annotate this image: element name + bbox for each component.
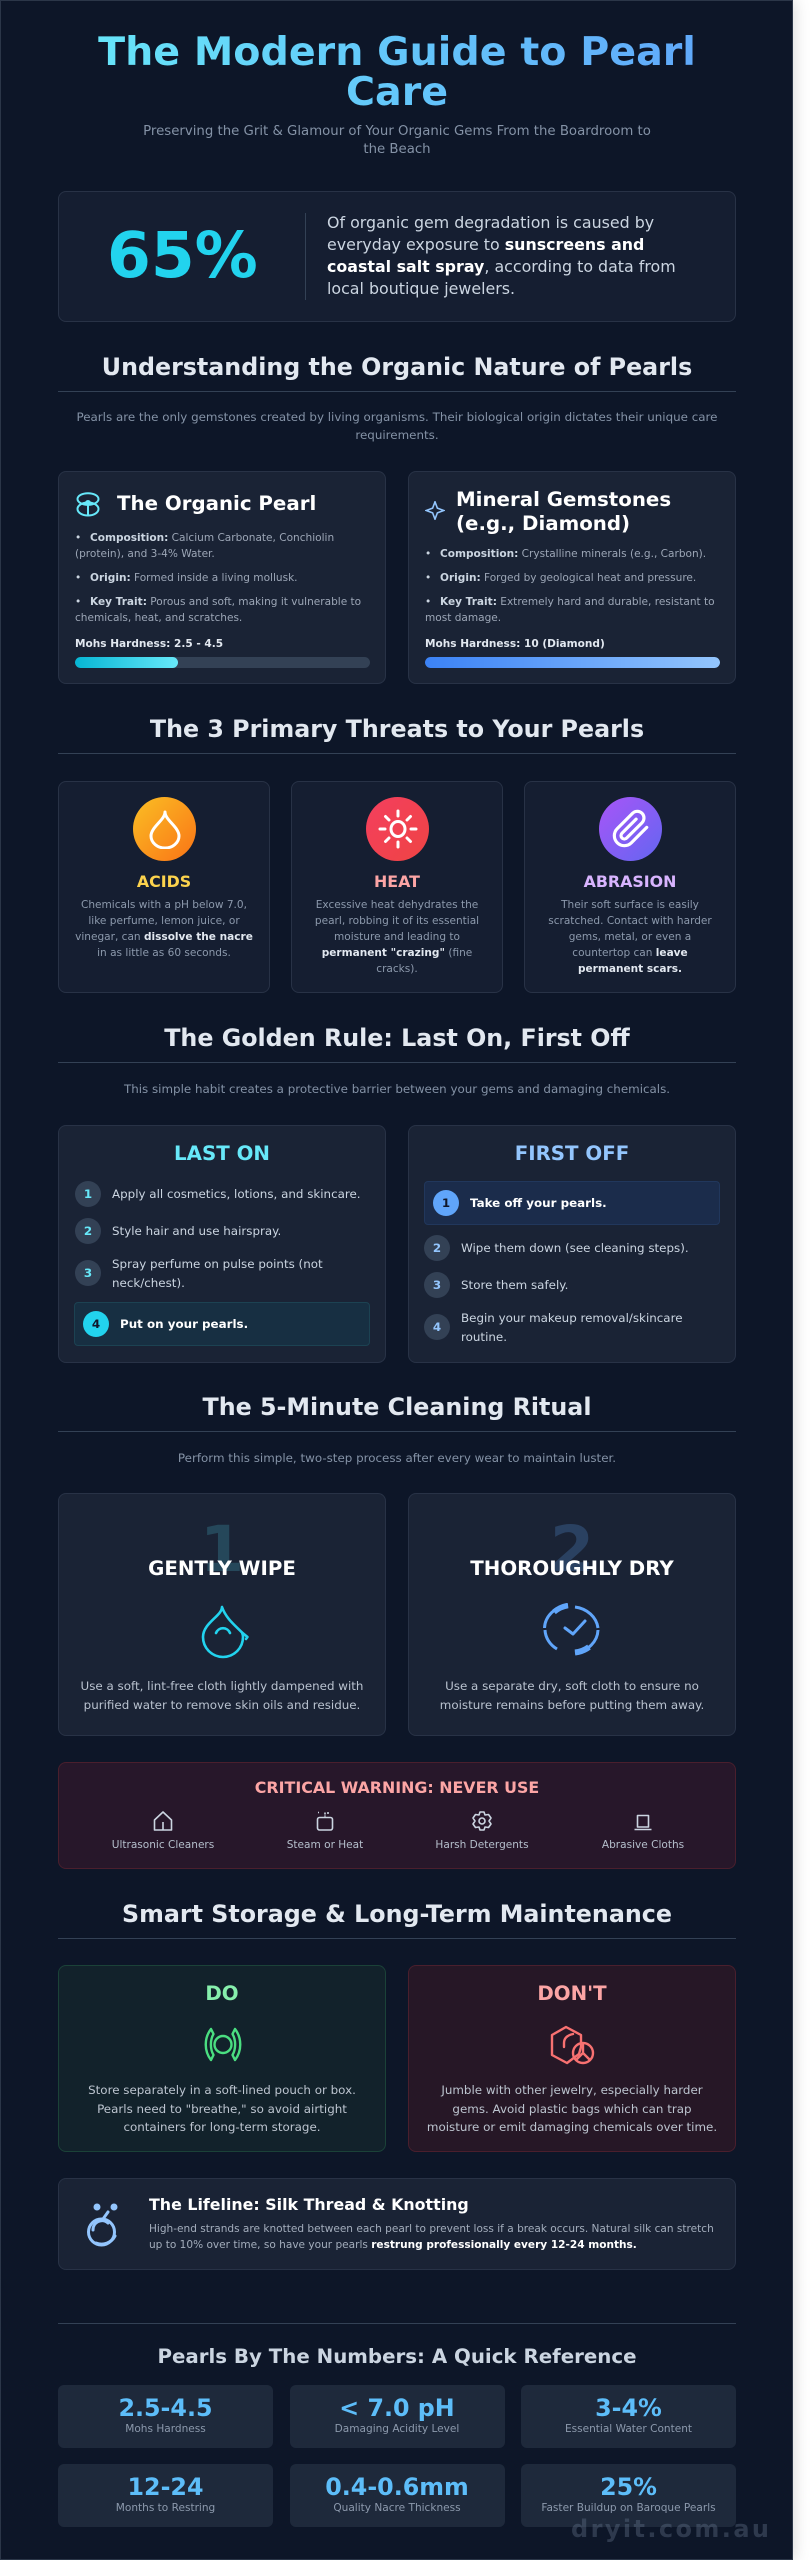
step 2 number: 2 <box>433 1241 441 1255</box>
subtitle: the Beach <box>363 142 431 157</box>
step 1 text: Take off your pearls. <box>470 1196 607 1210</box>
card heading: The Organic Pearl <box>117 492 316 515</box>
card text: Jumble with other jewelry, especially harder <box>441 2083 703 2097</box>
threat text: vinegar, can dissolve the nacre <box>75 931 253 943</box>
step 4 number <box>424 1314 450 1340</box>
stat: mohs hardness: 2.5-4.5 <box>118 2394 212 2422</box>
step 1 number <box>75 1181 101 1207</box>
stat text: Of organic gem degradation is caused by <box>327 213 654 232</box>
stat: nacre <box>290 2464 504 2527</box>
item: harsh detergents: Harsh Detergents <box>435 1839 529 1851</box>
step 2 number: 2 <box>84 1224 92 1238</box>
threat text: gems, metal, or even a <box>569 931 691 943</box>
intro text: golden rule: This simple habit creates a protective barrier between your gems and damaging chemicals. <box>124 1082 670 1096</box>
panel: critical warning <box>58 1762 736 1869</box>
panel: acids <box>58 781 270 993</box>
icon: pearl <box>76 492 100 516</box>
stat: water content <box>521 2385 736 2448</box>
intro text: cleaning ritual: Perform this simple, two-step process after every wear to maintain luster. <box>178 1451 616 1465</box>
panel: the organic pearl <box>58 471 386 684</box>
step 1 text: Apply all cosmetics, lotions, and skincare. <box>112 1187 361 1201</box>
panel: the lifeline <box>58 2178 736 2270</box>
stat: restring <box>58 2464 273 2527</box>
hardness bar <box>425 657 720 668</box>
card text: Store separately in a soft-lined pouch or box. <box>88 2083 356 2097</box>
stat text: coastal salt spray, according to data from <box>327 257 676 276</box>
item: steam or heat: Steam or Heat <box>287 1839 363 1851</box>
step 2 text: Wipe them down (see cleaning steps). <box>461 1241 689 1255</box>
card heading: DON'T <box>537 1982 607 2005</box>
card heading: DO <box>205 1982 239 2005</box>
panel: the organic pearl: Origin: Formed inside a living mollusk. <box>90 572 298 584</box>
panel: 65% stat callout <box>58 191 736 322</box>
item: steam or heat <box>287 1812 363 1851</box>
panel: first off <box>408 1125 736 1363</box>
item: abrasive cloths: Abrasive Cloths <box>602 1839 684 1851</box>
threat text <box>315 899 479 975</box>
card text: gems. Avoid plastic bags which can trap <box>452 2102 692 2116</box>
stat: water content: Essential Water Content <box>565 2423 692 2435</box>
threat text <box>548 899 712 975</box>
step 2 text: Style hair and use hairspray. <box>112 1224 281 1238</box>
intro text: organic nature: Pearls are the only gemstones created by living organisms. Their biological origin dictates their unique care <box>76 410 718 424</box>
title: Care <box>346 68 448 114</box>
stat: acidity <box>290 2385 504 2448</box>
step text: Use a separate dry, soft cloth to ensure no <box>445 1679 699 1693</box>
heading: by the numbers: Pearls By The Numbers: A Quick Reference <box>157 2345 637 2368</box>
panel: don't <box>408 1965 736 2152</box>
threat text: moisture and leading to <box>334 931 460 943</box>
intro text: organic nature <box>76 410 718 442</box>
stat: nacre: 0.4-0.6mm <box>325 2473 469 2501</box>
watermark: dryit.com.au <box>571 2515 771 2543</box>
stat: restring: 12-24 <box>128 2473 203 2501</box>
icon: sparkle gem <box>425 501 445 520</box>
icon: silk thread <box>87 2204 118 2246</box>
panel: mineral gemstones: • <box>425 572 431 584</box>
step 4 text: routine. <box>461 1330 507 1344</box>
stat divider <box>305 213 306 300</box>
threat text: in as little as 60 seconds. <box>97 947 231 959</box>
step 4 number: 4 <box>92 1317 100 1331</box>
step text: purified water to remove skin oils and residue. <box>84 1698 360 1712</box>
step 3 number: 3 <box>84 1266 92 1280</box>
panel: last on <box>58 1125 386 1363</box>
panel: mineral gemstones: • <box>425 596 431 608</box>
title <box>58 33 736 112</box>
item: ultrasonic cleaners: Ultrasonic Cleaners <box>112 1839 214 1851</box>
stat text: local boutique jewelers. <box>327 279 515 298</box>
step 3 text <box>112 1257 323 1290</box>
item: abrasive cloths <box>602 1814 684 1851</box>
step 2 number <box>75 1218 101 1244</box>
panel: mineral gemstones <box>408 471 736 684</box>
lifeline text: High-end strands are knotted between each pearl to prevent loss if a break occurs. Natural silk can stretch <box>149 2223 714 2235</box>
lifeline text: up to 10% over time, so have your pearls restrung professionally every 12-24 months. <box>149 2239 637 2251</box>
step 3 number <box>75 1260 101 1286</box>
panel: the organic pearl: chemicals, heat, and scratches. <box>75 612 242 624</box>
bullet list: (protein), and 3-4% Water. <box>75 548 215 560</box>
subtitle: Preserving the Grit & Glamour of Your Organic Gems From the Boardroom to <box>143 124 651 139</box>
icon: sun <box>366 797 429 861</box>
stat: water content: 3-4% <box>595 2394 662 2422</box>
item: ultrasonic cleaners <box>112 1811 214 1851</box>
step 2 number <box>424 1235 450 1261</box>
threat text: Chemicals with a pH below 7.0, <box>81 899 247 911</box>
stat: buildup: 25% <box>600 2473 657 2501</box>
step 3 number <box>424 1272 450 1298</box>
threat text: cracks). <box>376 963 418 975</box>
panel: the organic pearl: Key Trait: Porous and soft, making it vulnerable to <box>90 596 361 608</box>
stat: acidity: Damaging Acidity Level <box>335 2423 459 2435</box>
panel: step 1 gently wipe <box>58 1493 386 1736</box>
step text <box>440 1679 704 1712</box>
icon: acid drop <box>133 797 196 861</box>
threat text: Their soft surface is easily <box>561 899 699 911</box>
card heading: (e.g., Diamond) <box>456 512 630 535</box>
bullet list: Composition: Crystalline minerals (e.g., Carbon). <box>440 548 706 560</box>
step 4 text: Put on your pearls. <box>120 1317 248 1331</box>
stat text <box>327 213 676 298</box>
threat title: ABRASION <box>584 872 676 891</box>
step text: Use a soft, lint-free cloth lightly dampened with <box>81 1679 363 1693</box>
step 4 text <box>461 1311 682 1344</box>
stat: restring: Months to Restring <box>116 2502 215 2514</box>
hardness bar <box>75 657 370 668</box>
stat: acidity: < 7.0 pH <box>339 2394 455 2422</box>
threat title: ACIDS <box>137 872 191 891</box>
icon: breathing pearl <box>204 2028 242 2062</box>
card text <box>427 2083 717 2134</box>
heading: storage: Smart Storage & Long-Term Maintenance <box>122 1900 672 1928</box>
panel: do <box>58 1965 386 2152</box>
lifeline text <box>149 2223 714 2251</box>
stat text: everyday exposure to sunscreens and <box>327 235 644 254</box>
threat text: Excessive heat dehydrates the <box>316 899 478 911</box>
big stat number: 65% <box>107 219 258 292</box>
step heading: GENTLY WIPE <box>148 1557 296 1580</box>
item: harsh detergents <box>435 1811 529 1851</box>
threat text: pearl, robbing it of its essential <box>315 915 479 927</box>
threat title: HEAT <box>374 872 420 891</box>
title: The Modern Guide to Pearl <box>98 29 696 75</box>
card text: moisture or emit damaging chemicals over time. <box>427 2120 717 2134</box>
threat text: scratched. Contact with harder <box>548 915 712 927</box>
panel: abrasion <box>524 781 736 993</box>
stat: buildup: Faster Buildup on Baroque Pearls <box>541 2502 716 2514</box>
icon: dry check <box>543 1603 600 1656</box>
step text: moisture remains before putting them away. <box>440 1698 704 1712</box>
intro text: organic nature: requirements. <box>355 428 439 442</box>
bullet list: Composition: Calcium Carbonate, Conchiolin <box>90 532 334 544</box>
warning heading: CRITICAL WARNING: NEVER USE <box>255 1778 539 1797</box>
step 4 text: Begin your makeup removal/skincare <box>461 1311 682 1325</box>
icon: water drop <box>202 1606 249 1658</box>
heading: organic nature: Understanding the Organic Nature of Pearls <box>102 353 692 381</box>
stat: nacre: Quality Nacre Thickness <box>333 2502 461 2514</box>
step 1 highlighted <box>424 1181 720 1225</box>
icon: paperclip <box>599 797 662 861</box>
card heading <box>456 488 671 535</box>
step text <box>81 1679 363 1712</box>
card text <box>88 2083 356 2134</box>
large step number: 2 <box>550 1512 594 1586</box>
step 1 number <box>433 1190 459 1216</box>
step heading: THOROUGHLY DRY <box>470 1557 674 1580</box>
threat text <box>75 899 253 959</box>
panel: mineral gemstones: Origin: Forged by geological heat and pressure. <box>440 572 696 584</box>
heading: cleaning ritual: The 5-Minute Cleaning Ritual <box>202 1393 591 1421</box>
step 1 number: 1 <box>84 1187 92 1201</box>
heading: threats: The 3 Primary Threats to Your Pearls <box>150 715 644 743</box>
threat text: permanent scars. <box>578 963 682 975</box>
panel: step 2 thoroughly dry <box>408 1493 736 1736</box>
step 4 number <box>83 1311 109 1337</box>
threat text: countertop can leave <box>572 947 688 959</box>
lifeline heading: The Lifeline: Silk Thread & Knotting <box>149 2195 469 2214</box>
card text: Pearls need to "breathe," so avoid airtight <box>97 2102 347 2116</box>
subtitle <box>143 124 651 157</box>
step 4 number: 4 <box>433 1320 441 1334</box>
hardness label: Mohs Hardness: 2.5 - 4.5 <box>75 638 223 650</box>
step 4 highlighted <box>74 1302 370 1346</box>
panel: mineral gemstones: most damage. <box>425 612 501 624</box>
stat: mohs hardness: Mohs Hardness <box>125 2423 206 2435</box>
panel: mineral gemstones: Key Trait: Extremely hard and durable, resistant to <box>440 596 715 608</box>
step 3 text: Spray perfume on pulse points (not <box>112 1257 323 1271</box>
step 3 number: 3 <box>433 1278 441 1292</box>
bullet list: • <box>425 548 431 560</box>
step 3 text: neck/chest). <box>112 1276 185 1290</box>
card heading: FIRST OFF <box>515 1142 629 1165</box>
panel: heat <box>291 781 503 993</box>
step 1 number: 1 <box>442 1196 450 1210</box>
threat text: like perfume, lemon juice, or <box>88 915 240 927</box>
panel: the organic pearl: • <box>75 572 81 584</box>
panel: the organic pearl: • <box>75 596 81 608</box>
bullet list: • <box>75 532 81 544</box>
card heading: Mineral Gemstones <box>456 488 671 511</box>
card text: containers for long-term storage. <box>123 2120 321 2134</box>
heading: golden rule: The Golden Rule: Last On, First Off <box>164 1024 630 1052</box>
hardness label: Mohs Hardness: 10 (Diamond) <box>425 638 605 650</box>
stat: buildup <box>521 2464 736 2527</box>
step 3 text: Store them safely. <box>461 1278 568 1292</box>
card heading: LAST ON <box>174 1142 270 1165</box>
stat: mohs hardness <box>58 2385 273 2448</box>
icon: no plastic <box>550 2026 594 2064</box>
large step number: 1 <box>200 1512 244 1586</box>
threat text: permanent "crazing" (fine <box>322 947 472 959</box>
bullet list <box>75 532 334 560</box>
